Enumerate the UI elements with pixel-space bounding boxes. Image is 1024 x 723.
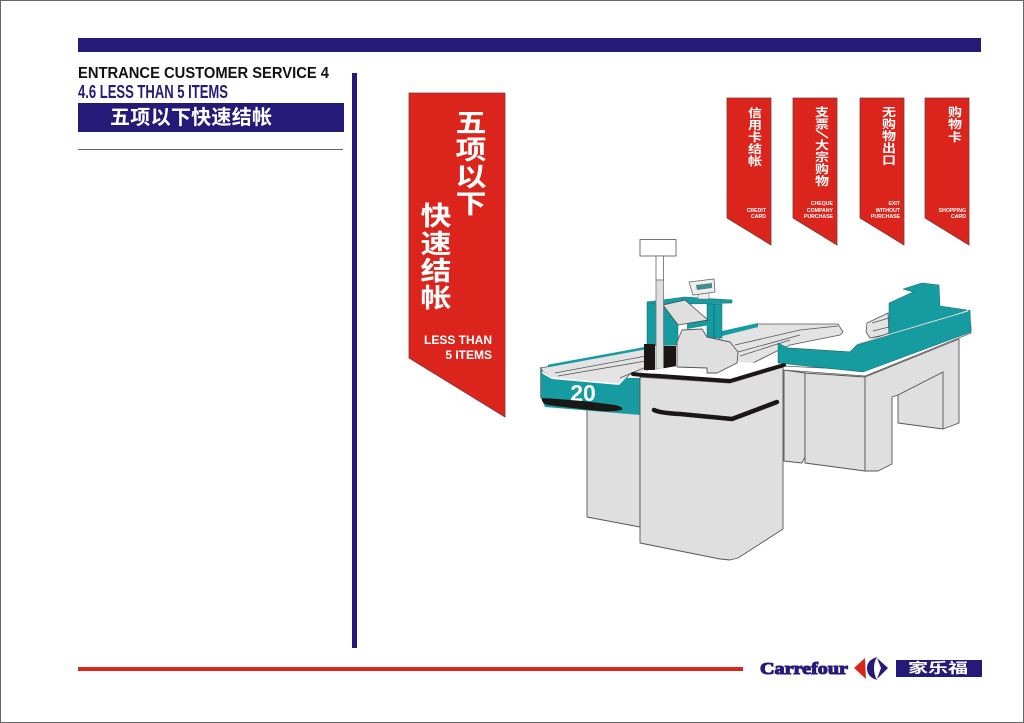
small banner: cheque company purchase: 物 xyxy=(815,174,829,188)
small banner: cheque company purchase: COMPANY xyxy=(807,208,834,214)
top header bar xyxy=(78,38,981,52)
banner chinese text: 速 xyxy=(421,230,451,259)
small banner: credit card: 卡 xyxy=(748,130,762,144)
small banner: exit without purchase: PURCHASE xyxy=(871,214,901,220)
cash register xyxy=(677,329,738,373)
rear conveyor xyxy=(715,323,843,372)
banner english text: LESS THAN xyxy=(424,333,492,347)
banner chinese text: 项 xyxy=(456,136,487,165)
small banner: exit without purchase: WITHOUT xyxy=(876,208,901,214)
banner chinese text: 快 xyxy=(421,202,452,231)
small banner: exit without purchase: 口 xyxy=(882,153,896,167)
small banner: shopping card xyxy=(925,98,969,245)
rear left pedestal xyxy=(587,405,640,527)
counter edge xyxy=(633,365,784,381)
small banner: cheque company purchase: 宗 xyxy=(815,150,829,164)
small banner: credit card: CREDIT xyxy=(747,208,767,214)
vertical divider xyxy=(352,73,357,648)
counter handle xyxy=(654,402,777,419)
small banner: credit card: 用 xyxy=(748,118,762,132)
banner chinese text: 以 xyxy=(456,163,487,192)
wordmark: Carrefour xyxy=(760,659,849,678)
right teal counter xyxy=(778,283,971,376)
small banner: exit without purchase xyxy=(860,98,904,245)
small banner: exit without purchase: 物 xyxy=(882,129,896,143)
bottom red rule xyxy=(78,667,743,671)
small banner: cheque company purchase: 购 xyxy=(815,162,829,176)
small banner: exit without purchase: 购 xyxy=(882,117,896,131)
sign pole xyxy=(640,240,676,372)
small banner: cheque company purchase: PURCHASE xyxy=(804,214,834,220)
card terminal xyxy=(689,279,715,299)
logo mark xyxy=(854,657,888,680)
small banner: shopping card: 物 xyxy=(948,117,962,131)
small banner: credit card: 帐 xyxy=(748,154,762,168)
small banner: cheque company purchase: 支 xyxy=(815,105,829,119)
small banner: shopping card: 购 xyxy=(948,105,962,119)
right base legs xyxy=(784,339,959,471)
chinese heading band: 五项以下快速结帐 xyxy=(110,106,272,129)
small banner: exit without purchase: 无 xyxy=(882,105,896,119)
banner english text: 5 ITEMS xyxy=(445,348,492,362)
small banner: exit without purchase: EXIT xyxy=(888,201,901,207)
display panel xyxy=(663,300,708,325)
back right packing area xyxy=(788,313,889,352)
small banner: shopping card: CARD xyxy=(951,214,966,220)
large hanging banner xyxy=(409,93,505,417)
banner chinese text: 帐 xyxy=(421,284,452,313)
small banner: shopping card: 卡 xyxy=(948,130,962,144)
black bumper xyxy=(542,398,622,411)
black pole guards xyxy=(644,344,676,370)
carrefour logo xyxy=(760,657,982,680)
small banner: credit card: CARD xyxy=(751,214,766,220)
checkout counter illustration xyxy=(540,240,971,560)
small banner: exit without purchase: 出 xyxy=(882,141,896,155)
section heading: ENTRANCE CUSTOMER SERVICE 4 xyxy=(78,65,329,82)
title block xyxy=(78,65,344,132)
lane number: 20 xyxy=(570,380,596,406)
banner chinese text xyxy=(421,109,487,313)
small banner: cheque company purchase xyxy=(793,98,837,245)
counter top xyxy=(636,362,784,381)
left teal front panel xyxy=(540,367,641,415)
left conveyor belt xyxy=(541,347,647,384)
banner chinese text: 五 xyxy=(456,109,486,138)
banner english text xyxy=(424,333,492,362)
small banner: cheque company purchase: 票 xyxy=(815,118,829,131)
small banner: credit card: 信 xyxy=(748,106,762,120)
banner chinese text: 结 xyxy=(421,257,451,286)
chinese heading band xyxy=(78,103,344,132)
small banner: cheque company purchase: CHEQUE xyxy=(811,201,834,207)
main counter body xyxy=(640,367,783,560)
banner chinese text: 下 xyxy=(456,190,486,219)
small banner: credit card: 结 xyxy=(748,142,762,156)
chinese name box: 家乐福 xyxy=(908,660,968,676)
small banner: shopping card: SHOPPING xyxy=(939,208,966,214)
small banner: credit card xyxy=(727,98,771,245)
chinese name box xyxy=(896,660,982,677)
small banner: cheque company purchase: 大 xyxy=(815,138,829,152)
subsection heading: 4.6 LESS THAN 5 ITEMS xyxy=(78,82,228,102)
pay station stand xyxy=(647,297,732,346)
